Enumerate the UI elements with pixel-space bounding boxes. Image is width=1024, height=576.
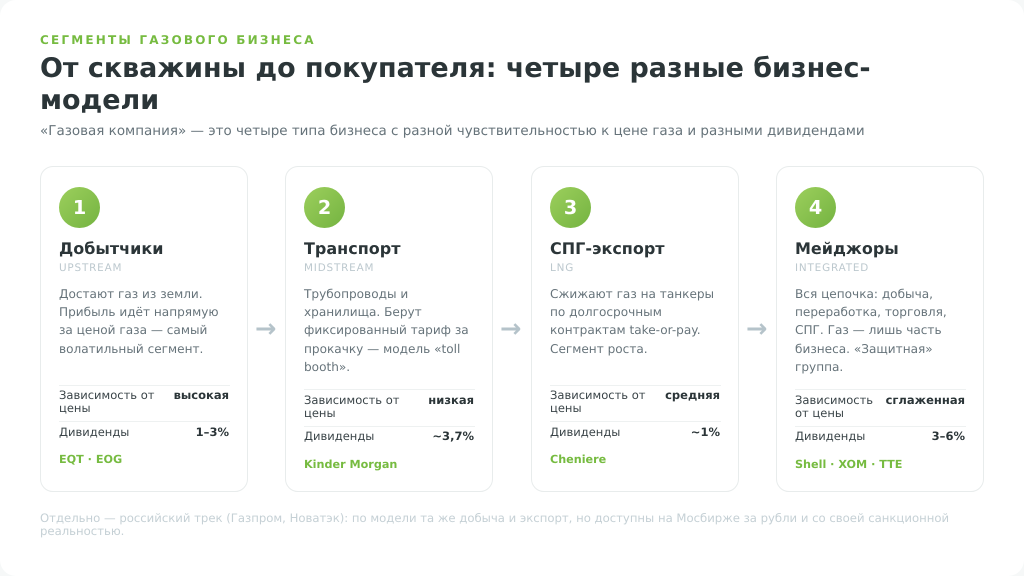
number badge 4: [795, 187, 836, 228]
number badge 3: [550, 187, 591, 228]
card 3 tickers: Cheniere: [550, 453, 606, 466]
card 1 price dependence value: высокая: [174, 388, 229, 402]
card 4 price dependence value: сглаженная: [886, 393, 965, 407]
card 4 price dependence label: Зависимость: [795, 393, 873, 407]
number badge 3: 3: [564, 196, 577, 219]
card 4 description: [795, 287, 947, 374]
card 1 description: волатильный сегмент.: [59, 342, 203, 356]
card 4 description: СПГ. Газ — лишь часть: [795, 323, 942, 337]
subtitle: «Газовая компания» — это четыре типа бизнеса с разной чувствительностью к цене газа и разными дивидендами: [40, 123, 865, 139]
card 2 description: хранилища. Берут: [304, 305, 422, 319]
card 2 description: Трубопроводы и: [304, 287, 408, 301]
card 3 price dependence label: [550, 388, 646, 415]
card 3 price dependence value: средняя: [665, 388, 720, 402]
card 3 description: Сегмент роста.: [550, 342, 648, 356]
panel: card 3 LNG: [531, 166, 739, 492]
card 4 description: бизнеса. «Защитная»: [795, 342, 933, 356]
card 4 description: переработка, торговля,: [795, 305, 947, 319]
eyebrow: СЕГМЕНТЫ ГАЗОВОГО БИЗНЕСА: [40, 33, 316, 47]
card 2 subheading: MIDSTREAM: [304, 262, 374, 274]
card 2 description: [304, 287, 469, 374]
card 1 description: [59, 287, 219, 356]
card 4 price dependence label: [795, 393, 873, 420]
card 2 tickers: Kinder Morgan: [304, 458, 397, 471]
card 3 price dependence label: цены: [550, 401, 582, 415]
card 3 description: [550, 287, 714, 356]
card 3 description: контрактам take-or-pay.: [550, 323, 701, 337]
footnote: [40, 511, 949, 538]
card 2 description: прокачку — модель «toll: [304, 342, 460, 356]
card 1 price dependence label: цены: [59, 401, 91, 415]
card 3 dividends label: Дивиденды: [550, 425, 620, 439]
card 3 description: по долгосрочным: [550, 305, 662, 319]
number badge 1: [59, 187, 100, 228]
title: [40, 53, 871, 116]
card 2 dividends value: ~3,7%: [432, 429, 474, 443]
card 3 subheading: LNG: [550, 262, 574, 274]
card 1 dividends label: Дивиденды: [59, 425, 129, 439]
card 2 price dependence value: низкая: [428, 393, 474, 407]
number badge 4: 4: [809, 196, 822, 219]
card 3 description: Сжижают газ на танкеры: [550, 287, 714, 301]
card 1 price dependence label: Зависимость от: [59, 388, 154, 402]
card 1 dividends value: 1–3%: [196, 425, 229, 439]
panel: card 1 upstream: [40, 166, 248, 492]
number badge 2: 2: [318, 196, 331, 219]
title: От скважины до покупателя: четыре разные бизнес-: [40, 53, 871, 84]
arrow 3: →: [746, 314, 767, 344]
card 3 heading: СПГ-экспорт: [550, 239, 665, 258]
card 4 tickers: Shell · XOM · TTE: [795, 458, 902, 471]
card 2 price dependence label: цены: [304, 406, 336, 420]
card 4 subheading: INTEGRATED: [795, 262, 869, 274]
card 1 subheading: UPSTREAM: [59, 262, 122, 274]
card 2 price dependence label: Зависимость от: [304, 393, 400, 407]
card 1 description: Прибыль идёт напрямую: [59, 305, 219, 319]
card 4 description: Вся цепочка: добыча,: [795, 287, 933, 301]
card 3 dividends value: ~1%: [691, 425, 720, 439]
footnote: реальностью.: [40, 524, 124, 538]
card 4 description: группа.: [795, 360, 843, 374]
card 4 dividends value: 3–6%: [932, 429, 965, 443]
card 4 dividends label: Дивиденды: [795, 429, 865, 443]
card 2 dividends label: Дивиденды: [304, 429, 374, 443]
panel: card 2 midstream: [285, 166, 493, 492]
arrow 1: →: [255, 314, 276, 344]
card 2 description: фиксированный тариф за: [304, 323, 469, 337]
card 1 description: за ценой газа — самый: [59, 323, 207, 337]
card 2 heading: Транспорт: [304, 239, 400, 258]
title: модели: [40, 85, 159, 116]
card 1 heading: Добытчики: [59, 239, 163, 258]
card 2 description: booth».: [304, 360, 350, 374]
number badge 1: 1: [73, 196, 86, 219]
card 4 price dependence label: от цены: [795, 406, 844, 420]
panel: card 4 integrated: [776, 166, 984, 492]
footnote: Отдельно — российский трек (Газпром, Новатэк): по модели та же добыча и экспорт, но доступны на Мосбирже за рубли и со своей санкционной: [40, 511, 949, 525]
arrow 2: →: [500, 314, 521, 344]
number badge 2: [304, 187, 345, 228]
card 1 price dependence label: [59, 388, 154, 415]
card 2 price dependence label: [304, 393, 400, 420]
card 1 tickers: EQT · EOG: [59, 453, 122, 466]
card 4 heading: Мейджоры: [795, 239, 899, 258]
card 1 description: Достают газ из земли.: [59, 287, 203, 301]
card 3 price dependence label: Зависимость от: [550, 388, 646, 402]
